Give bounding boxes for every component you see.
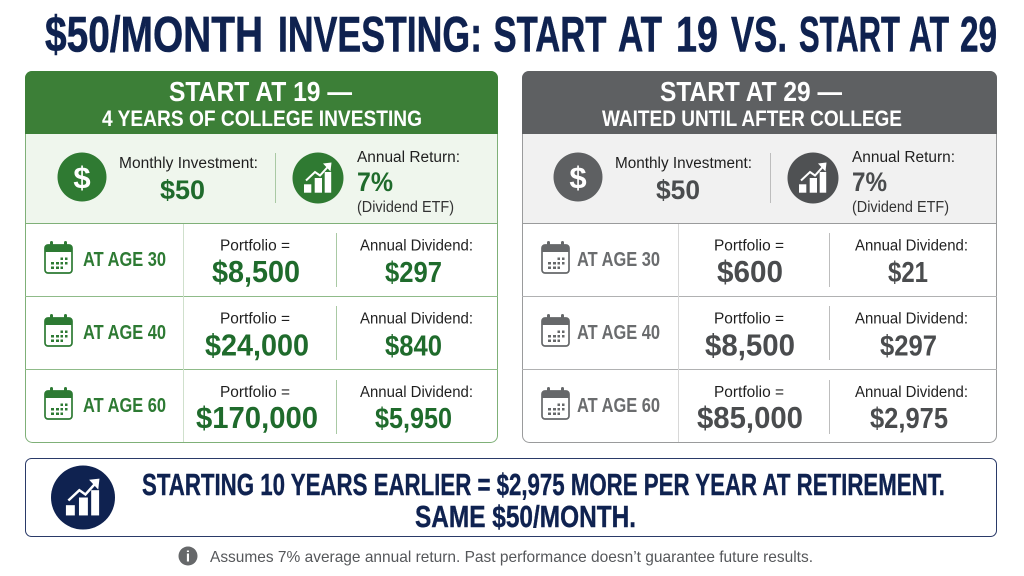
icon: dollar <box>58 152 106 202</box>
row: age 40 <box>542 310 968 362</box>
row: age 40: $297 <box>880 330 937 362</box>
panel header: start at 19: START AT 19 — <box>169 76 352 107</box>
row: age 30: Annual Dividend: <box>360 238 473 254</box>
summary band: start at 19 <box>25 134 498 224</box>
monthly investment: Monthly Investment: <box>615 155 752 172</box>
row: age 40: Portfolio = <box>714 310 784 328</box>
panel header: start at 19: 4 YEARS OF COLLEGE INVESTING <box>102 106 422 131</box>
panel header: start at 29 <box>522 71 997 134</box>
row: age 60: Portfolio = <box>220 384 290 401</box>
callout text: SAME $50/MONTH. <box>415 499 636 534</box>
title: VS. <box>731 6 787 62</box>
summary band: start at 29 <box>522 134 997 224</box>
monthly investment: $50 <box>160 175 205 205</box>
monthly investment: Monthly Investment: <box>119 155 258 172</box>
panel: start at 29 <box>522 71 997 442</box>
row: age 30: $600 <box>717 254 783 289</box>
row: age 40 <box>45 310 473 362</box>
row: age 30 <box>542 238 968 289</box>
row: age 60: AT AGE 60 <box>83 395 166 417</box>
panel header: start at 29: WAITED UNTIL AFTER COLLEGE <box>602 106 902 131</box>
annual return <box>852 149 955 216</box>
row: age 30: Annual Dividend: <box>855 238 968 254</box>
row: age 60: $2,975 <box>870 403 948 435</box>
footnote: Assumes 7% average annual return. Past performance doesn’t guarantee future results. <box>210 549 813 566</box>
title: START <box>494 6 606 62</box>
icon: growth chart <box>51 466 115 530</box>
monthly investment <box>615 155 752 205</box>
annual return <box>357 149 460 216</box>
annual return: (Dividend ETF) <box>357 199 454 216</box>
row: age 40: AT AGE 40 <box>83 322 166 344</box>
row: age 40: Annual Dividend: <box>855 310 968 328</box>
row: age 60: Portfolio = <box>714 384 784 401</box>
row: age 30: Portfolio = <box>220 238 290 254</box>
icon: dollar: $ <box>569 160 587 195</box>
panel: start at 19 <box>25 71 498 442</box>
row: age 30: AT AGE 30 <box>577 249 660 271</box>
annual return: Annual Return: <box>357 149 460 166</box>
row: age 60 <box>45 384 473 435</box>
title: 19 <box>676 6 718 62</box>
icon: dollar <box>554 152 602 202</box>
row: age 30: $8,500 <box>212 254 300 289</box>
title: AT <box>618 6 662 62</box>
icon: dollar: $ <box>73 160 91 195</box>
title: START <box>799 6 900 62</box>
title: INVESTING: <box>278 6 482 62</box>
row: age 60: Annual Dividend: <box>855 384 968 401</box>
monthly investment: $50 <box>656 175 700 205</box>
row: age 30 <box>45 238 473 289</box>
row: age 30: AT AGE 30 <box>83 249 166 271</box>
title: AT <box>909 6 949 62</box>
row: age 40: Portfolio = <box>220 310 290 328</box>
icon: growth chart <box>292 152 344 204</box>
row: age 60: Annual Dividend: <box>360 384 473 401</box>
footnote: i <box>186 548 190 566</box>
title <box>45 6 997 62</box>
icon: growth chart <box>788 152 838 204</box>
monthly investment <box>119 155 258 205</box>
row: age 60: $85,000 <box>697 400 803 435</box>
title: 29 <box>960 6 997 62</box>
annual return: 7% <box>852 167 887 197</box>
row: age 40: Annual Dividend: <box>360 310 473 328</box>
row: age 30: $21 <box>888 257 928 289</box>
row: age 30: $297 <box>385 257 442 289</box>
row: age 40: $8,500 <box>705 328 795 362</box>
row: age 60: $170,000 <box>196 400 318 435</box>
row: age 40: $840 <box>385 330 442 362</box>
row: age 40: AT AGE 40 <box>577 322 660 344</box>
row: age 30: Portfolio = <box>714 238 784 254</box>
row: age 60: AT AGE 60 <box>577 395 660 417</box>
callout banner <box>26 458 996 536</box>
annual return: (Dividend ETF) <box>852 199 949 216</box>
panel header: start at 19 <box>25 71 498 134</box>
callout text <box>142 467 945 534</box>
annual return: 7% <box>357 167 393 197</box>
title: $50/MONTH <box>45 6 263 62</box>
row: age 60 <box>542 384 968 435</box>
panel header: start at 29: START AT 29 — <box>660 76 842 107</box>
row: age 60: $5,950 <box>375 403 452 435</box>
row: age 40: $24,000 <box>205 328 309 362</box>
annual return: Annual Return: <box>852 149 955 166</box>
